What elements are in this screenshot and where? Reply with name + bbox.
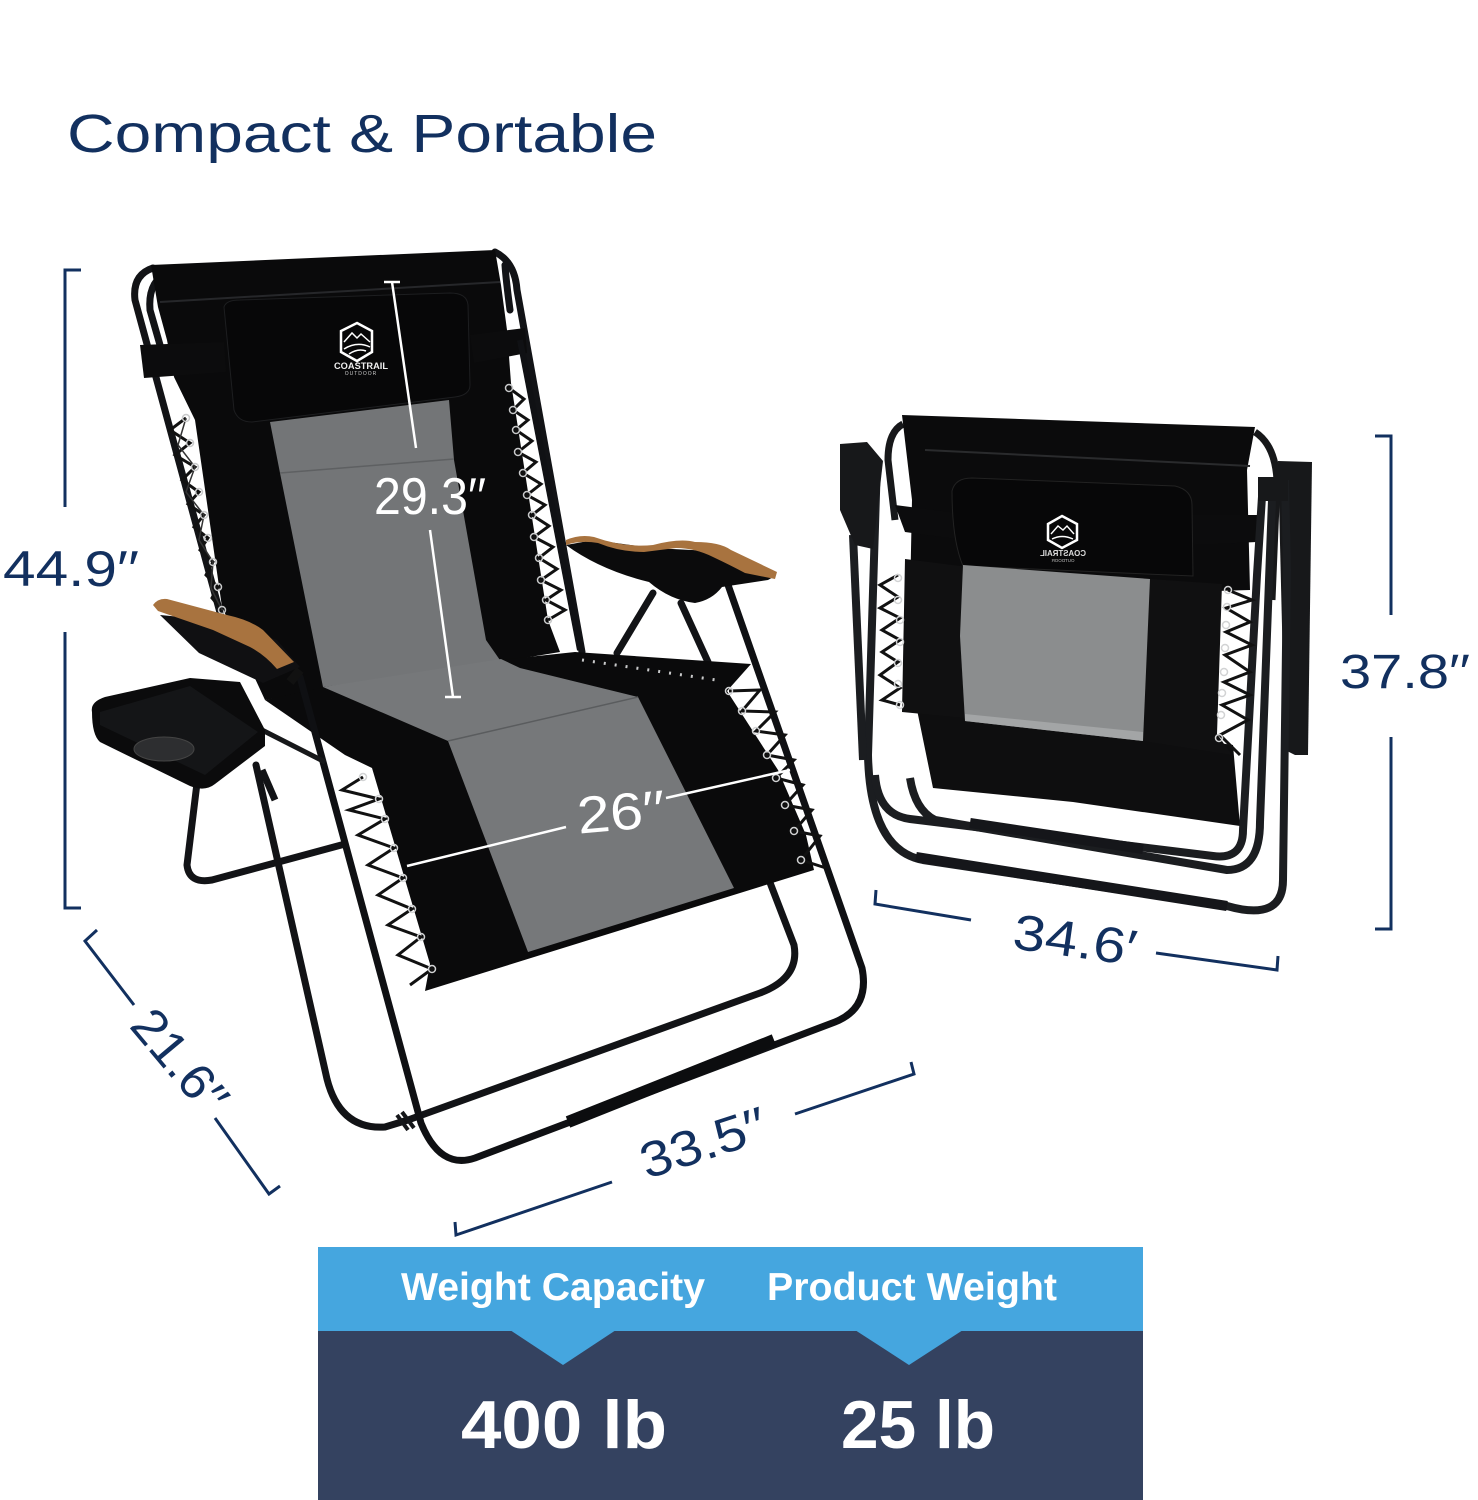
back rest seam: [160, 282, 500, 302]
folded front panel: [902, 559, 1232, 755]
folded lower fabric: [915, 700, 1240, 826]
folded lacing left: [880, 574, 904, 708]
folded strap left: [895, 505, 957, 539]
dimension: folded height 37.8: 37.8′′: [1340, 646, 1470, 699]
dimension: back length 29.3: 29.3′′: [374, 468, 486, 526]
dimension: seat width 26: 26′′: [575, 780, 667, 846]
folded grey hem: [965, 714, 1143, 741]
folded left arm mechanism: [840, 442, 883, 549]
back strap right: [470, 328, 527, 363]
folded frame: [853, 461, 1287, 910]
headrest pillow: [224, 293, 470, 422]
folded right arm top: [1258, 477, 1288, 501]
folded strap right: [1192, 515, 1258, 545]
folded thick bars: [916, 823, 1227, 906]
folded rear block: [1278, 461, 1312, 755]
table top surface: [100, 686, 258, 775]
side mechanism: [222, 690, 325, 762]
dimension: width 33.5: [455, 1062, 914, 1235]
dimension: height 44.9: 44.9′′: [3, 541, 139, 597]
stats panel: [318, 1247, 1143, 1500]
title: Compact & Portable: [67, 104, 657, 164]
footrest thick bar: [568, 1040, 774, 1122]
side table: [92, 678, 265, 789]
grey seat panel: [323, 659, 734, 952]
dimension: height 44.9: [3, 270, 139, 908]
back strap left: [140, 342, 226, 378]
arrow: weight capacity: [510, 1330, 616, 1365]
blue header band: [318, 1247, 1143, 1331]
folded lacing right: [1216, 586, 1252, 755]
logo: COASTRAIL: [334, 361, 389, 371]
dimension: back length 29.3: [374, 282, 486, 697]
folded back arch: [888, 424, 1277, 600]
logo: OUTDOOR: [345, 371, 377, 377]
dimension: folded width 34.6: 34.6′: [1010, 904, 1140, 976]
back panel seam: [280, 459, 454, 473]
seat lacing right: [726, 688, 826, 868]
value: 400 lb: 400 lb: [461, 1387, 667, 1463]
dimension: width 33.5: 33.5′′: [633, 1096, 774, 1190]
dimension: folded height 37.8: [1340, 436, 1470, 929]
chair rear frame: [135, 252, 795, 1127]
back lacing right: [506, 384, 565, 624]
front rail: [300, 582, 863, 1160]
grey back panel: [270, 400, 502, 687]
cup holder: [134, 737, 194, 761]
folded logo: OUTDOOR: [1051, 558, 1074, 563]
dimension: depth 21.6: [85, 930, 280, 1194]
arrow: product weight: [855, 1330, 963, 1365]
left armrest: [153, 599, 300, 683]
folded chair: [840, 415, 1312, 910]
seat fabric: [265, 652, 814, 991]
folded grey panel: [960, 565, 1150, 741]
back lacing left: [170, 414, 226, 614]
folded back fabric: [902, 415, 1255, 600]
folded seam: [925, 450, 1250, 466]
seat seam: [448, 697, 638, 741]
right back rail: [520, 340, 580, 650]
label: product weight: Product Weight: [767, 1266, 1057, 1309]
back rest fabric: [151, 250, 560, 700]
label: weight capacity: Weight Capacity: [401, 1266, 705, 1309]
right armrest: [566, 536, 777, 603]
seat lacing left: [342, 774, 436, 985]
dimension: depth 21.6: 21.6′′: [120, 997, 240, 1125]
folded pillow: [952, 478, 1193, 576]
frame in front of table: [262, 770, 275, 800]
dimension: seat width 26: [407, 770, 790, 866]
folded logo: [1040, 516, 1086, 563]
panel dark base: [318, 1330, 1143, 1500]
rear collar: [397, 1112, 414, 1130]
large reclining chair: [92, 250, 863, 1160]
dimension: folded width 34.6: [875, 890, 1278, 976]
value: 25 lb: 25 lb: [841, 1387, 995, 1463]
folded logo: COASTRAIL: [1040, 548, 1086, 558]
seat lacing top: [582, 660, 716, 680]
logo: [334, 323, 389, 377]
